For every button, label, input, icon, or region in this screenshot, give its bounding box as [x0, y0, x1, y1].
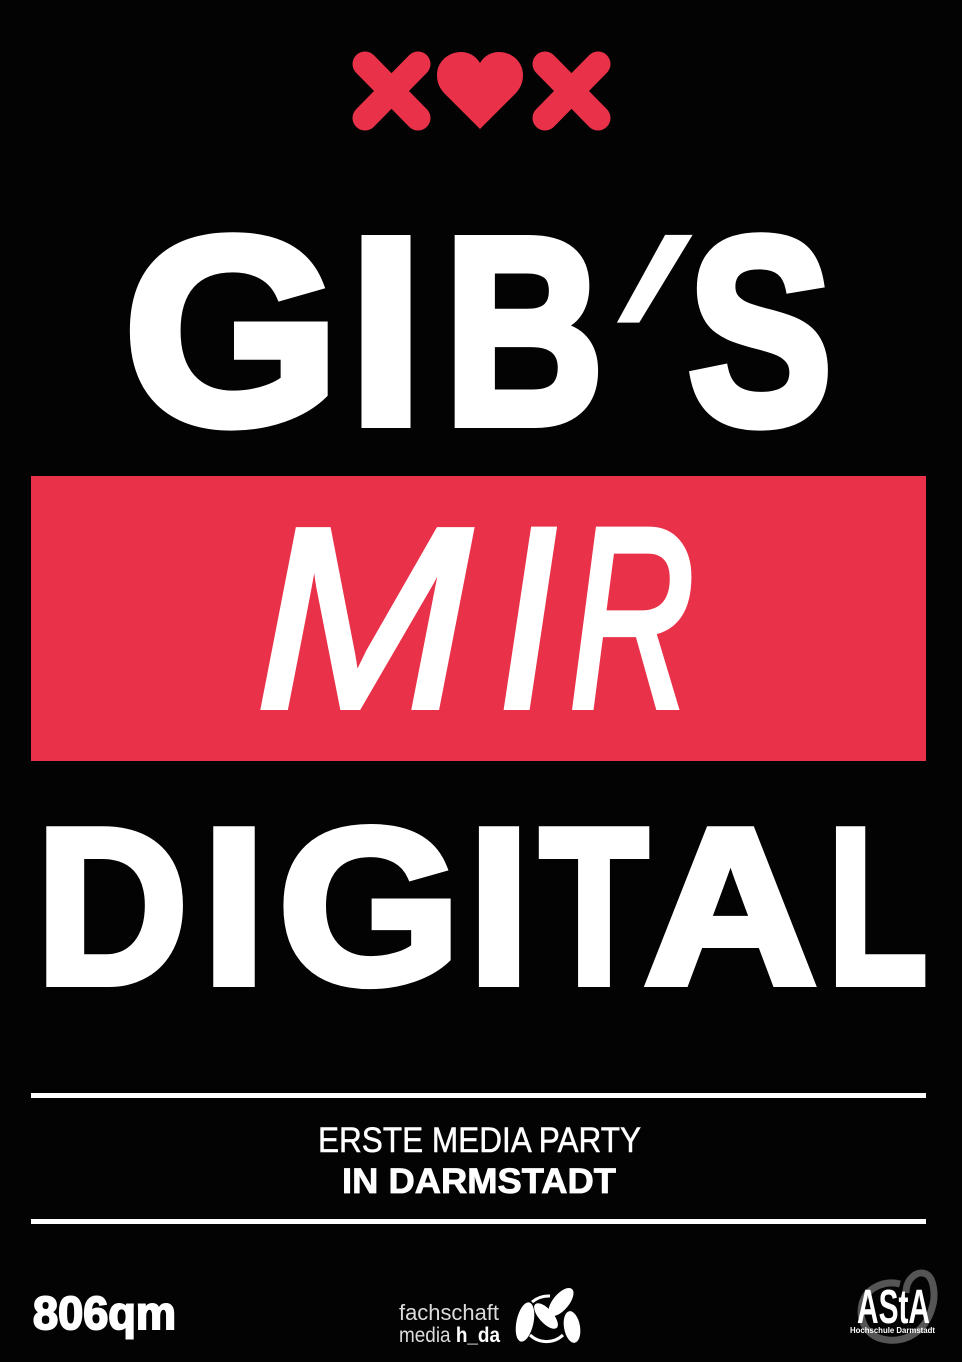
- heading: GIB'S: B: [444, 183, 604, 480]
- logo text: fachschaft: fachschaft: [399, 1300, 499, 1325]
- heading: DIGITAL: A: [644, 783, 817, 1031]
- panel: red band: [31, 476, 926, 761]
- subheading: in darmstadt: IN DARMSTADT: [342, 1162, 616, 1201]
- logo: fachschaft media h_da: [399, 1284, 583, 1347]
- heading: GIB'S: G: [124, 183, 340, 480]
- heading: DIGITAL: [36, 783, 927, 1031]
- subheading: erste media party: ERSTE MEDIA PARTY: [318, 1121, 641, 1160]
- logo text: hochschule darmstadt: Hochschule Darmstadt: [850, 1325, 935, 1335]
- heading: DIGITAL: L: [828, 783, 927, 1031]
- heading: MIR: [256, 475, 694, 762]
- heading: DIGITAL: I: [202, 783, 266, 1031]
- icon: right x: [545, 64, 598, 118]
- logo: 806qm: 806qm: [33, 1287, 176, 1339]
- heading: GIB'S: I: [348, 183, 424, 480]
- heading: MIR: I: [501, 478, 555, 759]
- icon: grey swirl: [861, 1273, 934, 1340]
- heading: DIGITAL: D: [36, 783, 188, 1031]
- heading: GIB'S: S: [688, 183, 832, 480]
- heading: MIR: R: [570, 476, 694, 761]
- icon: heart: [437, 52, 523, 129]
- heading: DIGITAL: I: [468, 783, 530, 1031]
- heading: GIB'S: ': [480, 163, 742, 539]
- heading: GIB'S: [124, 163, 832, 539]
- logo text: media h_da: media h_da: [399, 1324, 500, 1347]
- logo: asta: [850, 1273, 935, 1340]
- heading: DIGITAL: T: [540, 783, 648, 1031]
- heading: MIR: M: [256, 475, 474, 762]
- icon: media mark: [513, 1284, 583, 1344]
- heading: DIGITAL: G: [278, 783, 461, 1031]
- icon: xox row: [365, 52, 598, 129]
- icon: left x: [365, 64, 418, 118]
